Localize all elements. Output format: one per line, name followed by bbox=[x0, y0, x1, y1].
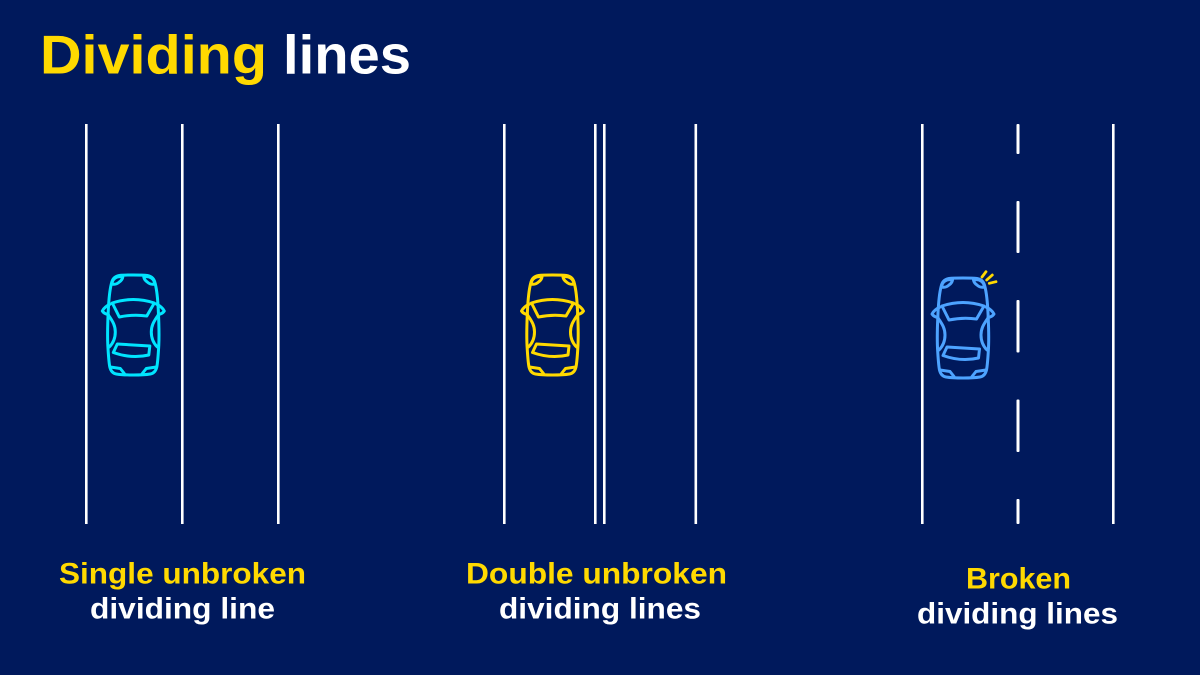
label: double unbroken dividing lines bbox=[466, 558, 727, 626]
label: double unbroken dividing lines: Double unbroken bbox=[466, 558, 727, 590]
road lines: single unbroken bbox=[85, 124, 280, 524]
icon: yellow car bbox=[522, 275, 584, 375]
label: single unbroken dividing line: dividing line bbox=[90, 592, 275, 626]
title: lines bbox=[283, 24, 411, 86]
road lines: double unbroken bbox=[503, 124, 697, 524]
label: double unbroken dividing lines: dividing lines bbox=[499, 592, 701, 626]
icon: blue car with indicator flash bbox=[932, 272, 996, 378]
icon: cyan car bbox=[102, 275, 164, 375]
label: broken dividing lines: dividing lines bbox=[917, 598, 1118, 630]
label: broken dividing lines: Broken bbox=[966, 562, 1071, 596]
label: broken dividing lines bbox=[917, 562, 1118, 630]
label: single unbroken dividing line: Single unbroken bbox=[59, 558, 306, 590]
title: Dividing bbox=[40, 24, 267, 86]
panel: broken dividing lines bbox=[917, 124, 1118, 630]
title bbox=[40, 24, 411, 86]
road lines: broken bbox=[921, 124, 1115, 524]
panel: single unbroken dividing line bbox=[59, 124, 306, 626]
label: single unbroken dividing line bbox=[59, 558, 306, 626]
panel: double unbroken dividing lines bbox=[466, 124, 727, 626]
